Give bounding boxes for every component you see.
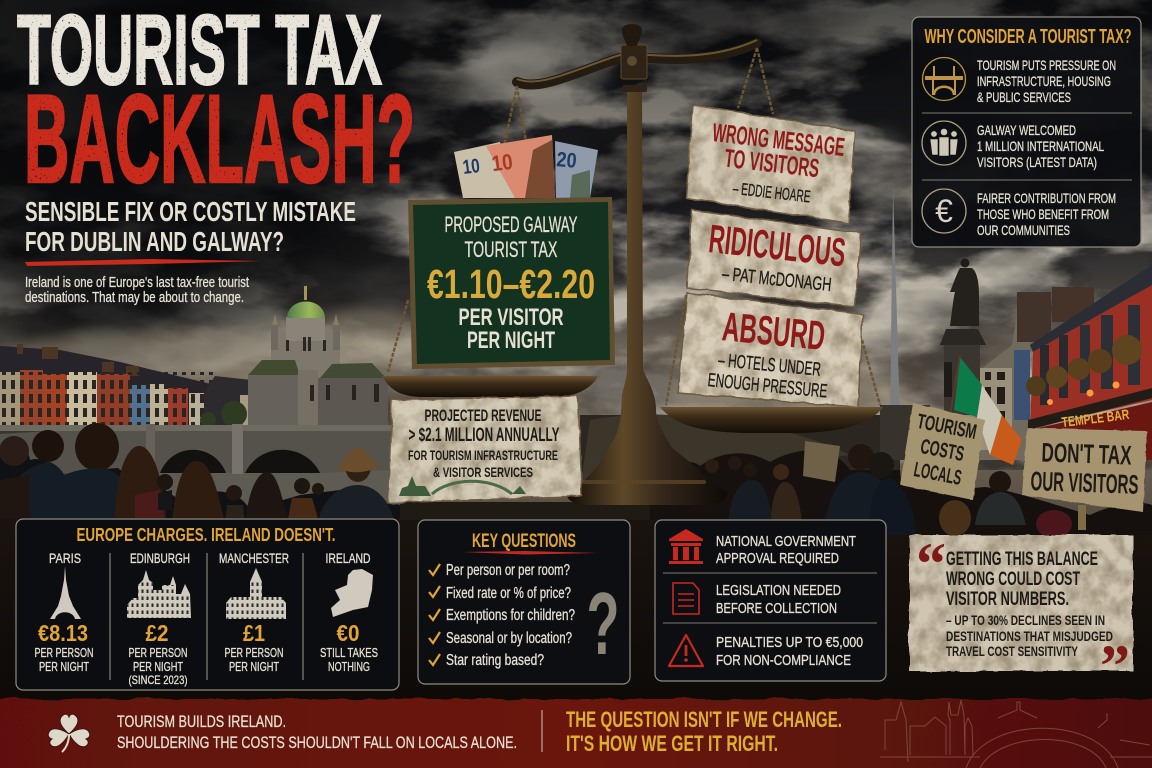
green proposal sign: €1.10–€2.20 (427, 261, 595, 307)
euro banknotes: 20 (556, 148, 578, 173)
callout: quote on torn paper (909, 531, 1133, 699)
panel: Europe charges: EUROPE CHARGES. IRELAND DOESN'T. (76, 525, 336, 545)
why text: fairer: OUR COMMUNITIES (977, 222, 1070, 238)
why text: fairer (977, 190, 1116, 238)
green proposal sign: PER NIGHT (467, 327, 555, 354)
column: Manchester: MANCHESTER (219, 550, 289, 566)
big question mark: ? (586, 574, 620, 673)
opening quote mark: “ (916, 531, 946, 597)
requirement: government approval: NATIONAL GOVERNMENT (716, 534, 856, 550)
requirement: penalties: PENALTIES UP TO €5,000 (716, 635, 863, 651)
banner text: left (117, 712, 517, 752)
title: BACKLASH? (24, 70, 415, 209)
icon: document (673, 583, 699, 614)
quote headline: WRONG COULD COST (946, 569, 1080, 590)
checklist: Per person or per room? (446, 562, 570, 579)
requirement: penalties (716, 635, 863, 669)
green proposal sign: PER VISITOR (458, 304, 564, 331)
requirement: legislation (716, 583, 841, 617)
protest sign: tourism costs locals: LOCALS (912, 458, 963, 490)
column: Ireland: IRELAND (326, 550, 370, 566)
panel: Europe charges (16, 519, 399, 690)
column: Ireland: €0 (336, 620, 360, 646)
why text: visitors: VISITORS (LATEST DATA) (977, 154, 1097, 170)
hanging sign: wrong message: WRONG MESSAGE (711, 117, 846, 162)
column: Edinburgh: (SINCE 2023) (128, 673, 188, 687)
intro text (25, 275, 249, 306)
column: Paris: PARIS (49, 550, 81, 566)
distant hills and plinth behind the scale (0, 415, 1152, 700)
requirement: legislation: BEFORE COLLECTION (716, 601, 837, 617)
why text: visitors: GALWAY WELCOMED (977, 122, 1076, 138)
icon: bridge (922, 58, 966, 100)
requirement: penalties: FOR NON-COMPLIANCE (716, 653, 851, 669)
checklist: Exemptions for children? (446, 607, 575, 624)
hanging sign: absurd: ENOUGH PRESSURE (707, 370, 828, 403)
quote headline (946, 549, 1098, 610)
banner text: left: SHOULDERING THE COSTS SHOULDN'T FALL ON LOCALS ALONE. (117, 733, 517, 752)
crowd in the centre (650, 441, 905, 525)
column: Paris: PER PERSON (34, 645, 94, 660)
hanging sign: ridiculous (687, 210, 861, 307)
hanging sign: absurd (678, 293, 863, 407)
protest sign: tourism costs locals (900, 403, 985, 500)
banner text: left: TOURISM BUILDS IRELAND. (117, 712, 286, 731)
panel: key questions (418, 520, 630, 684)
subtitle: FOR DUBLIN AND GALWAY? (25, 226, 284, 257)
checklist: Fixed rate or % of price? (446, 585, 571, 602)
protest sign: don't tax our visitors (1022, 428, 1147, 512)
column: Edinburgh (127, 550, 191, 687)
quote source text: TRAVEL COST SENSITIVITY (946, 643, 1078, 659)
column: Ireland: STILL TAKES (320, 645, 378, 660)
panel: key questions: KEY QUESTIONS (472, 531, 576, 552)
hanging sign: wrong message (686, 105, 855, 223)
protest sign: tourism costs locals: COSTS (918, 435, 966, 466)
red brick pub buildings: TEMPLE BAR (1061, 406, 1130, 430)
panel: why consider a tourist tax (912, 17, 1141, 247)
subtitle (25, 196, 356, 266)
hanging sign: absurd: – HOTELS UNDER (717, 350, 822, 381)
hanging sign: ridiculous: RIDICULOUS (707, 217, 848, 275)
icon: Eiffel tower (50, 566, 81, 619)
cathedral with green dome (248, 286, 388, 425)
Dublin skyline: left terrace houses (0, 344, 316, 428)
requirement: legislation: LEGISLATION NEEDED (716, 583, 841, 599)
icon: shamrock (48, 714, 90, 752)
icon: euro: € (935, 193, 953, 229)
checklist: Star rating based? (446, 652, 544, 669)
quote source text (946, 612, 1113, 659)
quote headline: VISITOR NUMBERS. (946, 589, 1069, 610)
column: Manchester: £1 (243, 620, 265, 646)
euro banknotes: 10 (461, 155, 481, 179)
intro text: destinations. That may be about to change. (25, 290, 244, 306)
icon: Manchester town hall (226, 568, 286, 619)
green proposal sign (408, 197, 615, 369)
requirement: government approval: APPROVAL REQUIRED (716, 551, 839, 567)
hanging sign: absurd: ABSURD (720, 303, 827, 359)
icon: government building (669, 529, 703, 564)
paper: projected revenue: FOR TOURISM INFRASTRUCTURE (408, 447, 558, 463)
statue on pedestal (940, 258, 986, 415)
scale chains, left and right (388, 48, 880, 405)
balance scale (382, 16, 883, 505)
scale base and column (567, 85, 727, 505)
hanging sign: wrong message: – EDDIE HOARE (732, 179, 811, 207)
why text: visitors (977, 122, 1104, 170)
crowd on the left watching the river (0, 423, 400, 530)
Irish tricolour flag (950, 355, 1022, 465)
panel: legal requirements (655, 520, 886, 681)
subtitle: SENSIBLE FIX OR COSTLY MISTAKE (25, 196, 356, 227)
green proposal sign: TOURIST TAX (464, 237, 558, 262)
column: Paris: €8.13 (38, 620, 88, 646)
column: Edinburgh: PER NIGHT (133, 659, 183, 674)
closing quote mark: ” (1100, 633, 1130, 699)
requirement: government approval (716, 534, 856, 567)
euro banknotes (454, 135, 598, 198)
icon: Edinburgh castle (127, 570, 191, 618)
icon: warning triangle (669, 635, 703, 666)
protest sign: tourism costs locals: TOURISM (915, 410, 979, 444)
paper: projected revenue: PROJECTED REVENUE (424, 406, 542, 425)
banner text: right: IT'S HOW WE GET IT RIGHT. (566, 731, 778, 756)
euro banknotes: 10 (490, 149, 514, 176)
icon: euro (922, 189, 966, 233)
column: Manchester: PER PERSON (224, 645, 284, 660)
scale beam (517, 16, 757, 85)
column: Edinburgh: £2 (146, 620, 168, 646)
checklist (429, 562, 575, 669)
column: Ireland (320, 550, 378, 674)
icon: three people (922, 121, 966, 165)
column: Edinburgh: PER PERSON (128, 645, 188, 660)
title (17, 0, 415, 209)
column: Edinburgh: EDINBURGH (130, 550, 190, 566)
icon: map of Ireland (331, 569, 373, 617)
paper: projected revenue (388, 396, 582, 503)
green proposal sign: PROPOSED GALWAY (444, 212, 578, 237)
column: Paris (34, 550, 94, 674)
paper: projected revenue: & VISITOR SERVICES (433, 464, 533, 480)
hanging sign: wrong message: TO VISITORS (723, 143, 821, 183)
red brick pub buildings (980, 265, 1152, 460)
line art: Dublin skyline and bridge (880, 700, 1152, 768)
column: Manchester: PER NIGHT (229, 659, 279, 674)
why text: pressure (977, 57, 1116, 105)
why text: pressure: & PUBLIC SERVICES (977, 89, 1071, 105)
intro text: Ireland is one of Europe's last tax-free tourist (25, 275, 249, 291)
paper: projected revenue: > $2.1 MILLION ANNUALLY (408, 425, 560, 446)
checklist: Seasonal or by location? (446, 630, 572, 647)
bottom banner (0, 699, 1152, 768)
foreground protesters, right (868, 452, 1152, 538)
banner text: right (566, 707, 842, 756)
column: Paris: PER NIGHT (39, 659, 89, 674)
spire of Dublin (880, 185, 930, 460)
river and stone bridge (0, 424, 392, 525)
scale pans (382, 376, 883, 433)
column: Manchester (219, 550, 289, 674)
column: Ireland: NOTHING (328, 659, 370, 674)
hanging sign: ridiculous: – PAT McDONAGH (721, 264, 833, 296)
banner text: right: THE QUESTION ISN'T IF WE CHANGE. (566, 707, 842, 732)
